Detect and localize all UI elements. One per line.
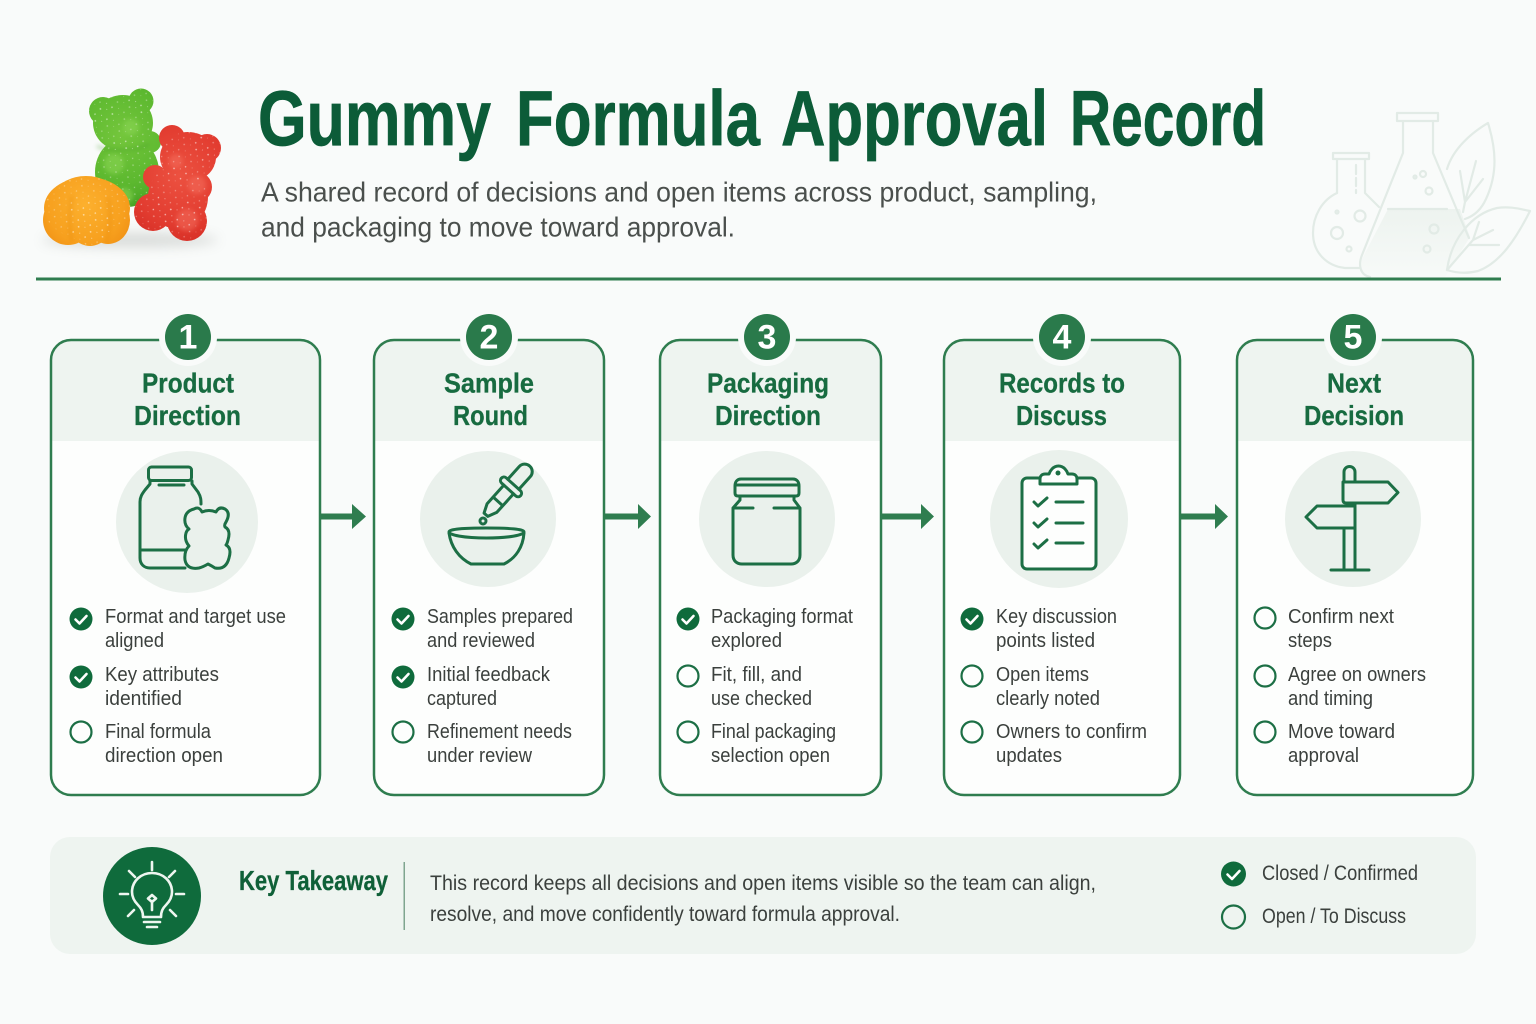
- checklist: and reviewed: [427, 629, 535, 652]
- checklist: identified: [105, 687, 182, 710]
- checklist: Key attributes: [105, 663, 219, 686]
- icon: light bulb: [103, 847, 201, 945]
- panel: key takeaway: [50, 837, 1476, 954]
- step number 4: 4: [1053, 318, 1072, 356]
- checklist: Final formula: [105, 720, 212, 743]
- panel: step 2 sample round: [374, 308, 604, 795]
- checklist: Packaging format: [711, 605, 853, 628]
- title: Approval: [781, 74, 1048, 162]
- heading: Discuss: [1016, 400, 1107, 431]
- step number 1: [159, 308, 217, 366]
- legend: Open / To Discuss: [1262, 905, 1406, 928]
- arrow 3 to 4: [882, 504, 934, 529]
- heading: Next: [1327, 368, 1381, 398]
- checklist: selection open: [711, 744, 830, 767]
- legend: Closed / Confirmed: [1262, 862, 1418, 885]
- step number 2: [460, 308, 518, 366]
- panel: step 1 product direction: [51, 308, 320, 795]
- checklist: [70, 605, 286, 767]
- title: Gummy: [258, 74, 491, 162]
- checklist: Key discussion: [996, 605, 1117, 628]
- step number 3: 3: [758, 318, 776, 356]
- panel: step 4 records to discuss: [944, 308, 1180, 795]
- title: Record: [1070, 74, 1266, 162]
- illustration: gummy bears: [42, 88, 221, 247]
- panel: step 5 next decision: [1237, 308, 1473, 795]
- heading: [444, 368, 534, 431]
- checklist: aligned: [105, 629, 164, 652]
- title: [258, 74, 1266, 162]
- checklist: Move toward: [1288, 720, 1395, 743]
- arrow 1 to 2: [321, 504, 366, 529]
- checklist: Samples prepared: [427, 605, 573, 628]
- checklist: [1254, 605, 1426, 767]
- heading: Product: [142, 368, 234, 398]
- takeaway text: This record keeps all decisions and open items visible so the team can align,: [430, 872, 1096, 895]
- title: Formula: [516, 74, 760, 162]
- arrow 4 to 5: [1181, 504, 1228, 529]
- takeaway text: resolve, and move confidently toward formula approval.: [430, 903, 900, 926]
- icon: dropper and bowl: [420, 451, 556, 587]
- heading: Direction: [715, 400, 821, 431]
- heading: Key Takeaway: [239, 865, 388, 896]
- checklist: steps: [1288, 629, 1332, 652]
- step number 3: [738, 308, 796, 366]
- checklist: under review: [427, 744, 532, 767]
- heading: Round: [453, 400, 528, 431]
- heading: Decision: [1304, 400, 1404, 431]
- heading: Records to: [999, 368, 1125, 398]
- step number 5: 5: [1344, 318, 1362, 356]
- icon: signpost: [1285, 451, 1421, 587]
- heading: Sample: [444, 368, 534, 398]
- icon: jar: [699, 451, 835, 587]
- panel: step 3 packaging direction: [660, 308, 881, 795]
- checklist: points listed: [996, 629, 1095, 652]
- checklist: Initial feedback: [427, 663, 551, 686]
- subtitle: and packaging to move toward approval.: [261, 212, 735, 242]
- checklist: clearly noted: [996, 687, 1100, 710]
- step number 4: [1033, 308, 1091, 366]
- checklist: Agree on owners: [1288, 663, 1426, 686]
- takeaway text: [430, 872, 1096, 926]
- icon: bottle and gummy bear: [116, 451, 258, 593]
- heading: [134, 368, 241, 431]
- checklist: Owners to confirm: [996, 720, 1147, 743]
- step number 2: 2: [480, 318, 498, 356]
- checklist: Final packaging: [711, 720, 836, 743]
- header divider: [36, 278, 1501, 280]
- checklist: direction open: [105, 744, 223, 767]
- checklist: and timing: [1288, 687, 1373, 710]
- checklist: [676, 605, 853, 767]
- icon: clipboard: [990, 450, 1128, 588]
- checklist: [960, 605, 1147, 767]
- checklist: updates: [996, 744, 1062, 767]
- heading: Packaging: [707, 368, 829, 398]
- heading: Direction: [134, 400, 241, 431]
- arrow 2 to 3: [605, 504, 651, 529]
- checklist: [392, 605, 573, 767]
- checklist: Fit, fill, and: [711, 663, 802, 686]
- checklist: use checked: [711, 687, 812, 710]
- legend: [1221, 862, 1418, 928]
- heading: [999, 368, 1125, 431]
- checklist: captured: [427, 687, 497, 710]
- checklist: Open items: [996, 663, 1089, 686]
- subtitle: A shared record of decisions and open items across product, sampling,: [261, 176, 1097, 208]
- checklist: explored: [711, 629, 782, 652]
- checklist: Format and target use: [105, 605, 286, 628]
- heading: [1304, 368, 1404, 431]
- heading: [707, 368, 829, 431]
- subtitle: [261, 176, 1097, 242]
- checklist: approval: [1288, 744, 1359, 767]
- step number 5: [1324, 308, 1382, 366]
- step number 1: 1: [179, 318, 197, 356]
- checklist: Confirm next: [1288, 605, 1394, 628]
- watermark: flasks and leaves: [1313, 113, 1530, 277]
- checklist: Refinement needs: [427, 720, 572, 743]
